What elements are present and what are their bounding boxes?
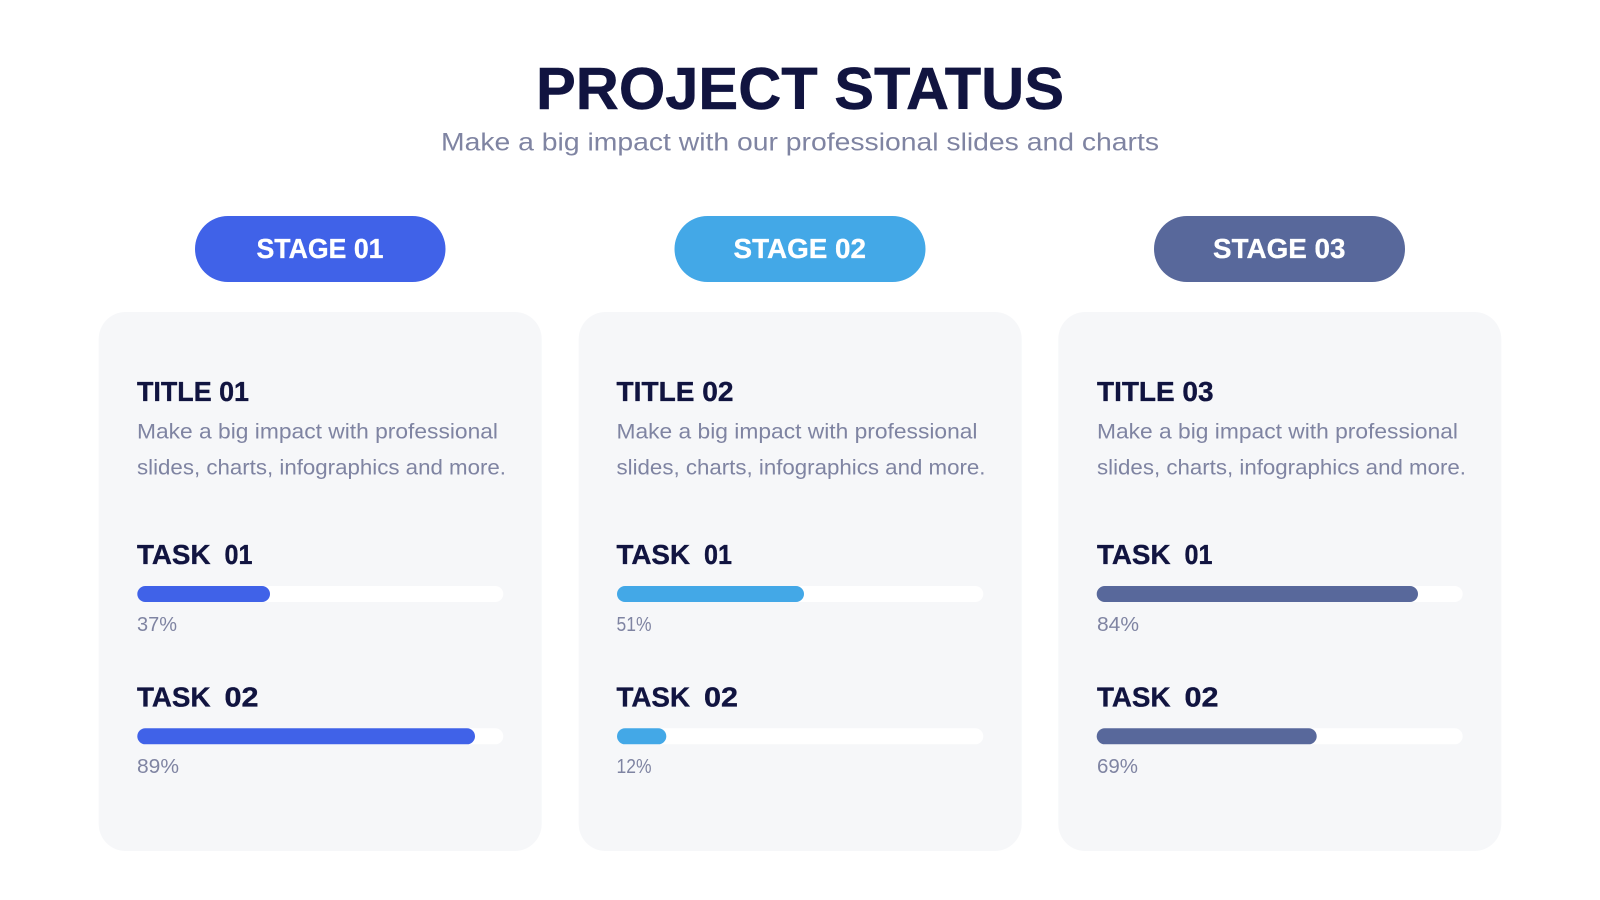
task label: task 02: 02 — [224, 682, 258, 712]
heading: title 02: TITLE 02 — [616, 376, 734, 407]
progress bar: 51% — [617, 586, 983, 602]
task label: task 02: TASK — [616, 682, 690, 712]
progress bar: 12% — [617, 728, 983, 744]
heading: title 01: TITLE 01 — [137, 376, 249, 407]
task label: task 02: TASK — [1097, 682, 1171, 712]
subtitle: Make a big impact with our professional slides and charts — [441, 128, 1159, 156]
badge: stage 02: STAGE 02 — [734, 233, 866, 264]
task label: task 01: TASK — [616, 539, 690, 570]
badge: stage 01 — [195, 216, 446, 282]
progress bar: 89% — [137, 728, 503, 744]
badge: stage 01: STAGE 01 — [256, 233, 384, 264]
text block: description — [616, 420, 986, 480]
text block: description — [1097, 420, 1466, 480]
panel: stage 01 — [99, 312, 542, 851]
task label: task 02: 02 — [1184, 682, 1218, 712]
value: 37%: 37% — [137, 613, 177, 636]
value: 51%: 51% — [616, 613, 652, 636]
task label: task 01: 01 — [704, 539, 732, 570]
task label: task 01: TASK — [1097, 539, 1171, 570]
text block: description: Make a big impact with professional — [1097, 420, 1458, 444]
panel: stage 02 — [579, 312, 1022, 851]
text block: description — [137, 420, 506, 480]
text block: description: slides, charts, infographics and more. — [137, 456, 506, 480]
value: 12%: 12% — [616, 755, 652, 778]
value: 89%: 89% — [137, 755, 179, 778]
progress bar: 69% — [1097, 728, 1463, 744]
value: 84%: 84% — [1097, 613, 1139, 636]
text block: description: Make a big impact with professional — [616, 420, 978, 444]
task label: task 01: 01 — [224, 539, 252, 570]
value: 69%: 69% — [1097, 755, 1138, 778]
task label: task 01: 01 — [1184, 539, 1212, 570]
badge: stage 02 — [674, 216, 926, 282]
task label: task 02: TASK — [137, 682, 211, 712]
text block: description: slides, charts, infographics and more. — [616, 456, 986, 480]
badge: stage 03 — [1154, 216, 1405, 282]
heading: title 03: TITLE 03 — [1097, 376, 1214, 407]
panel: stage 03 — [1058, 312, 1501, 851]
progress bar: 37% — [137, 586, 503, 602]
progress bar: 84% — [1097, 586, 1463, 602]
badge: stage 03: STAGE 03 — [1213, 233, 1346, 264]
task label: task 01: TASK — [137, 539, 211, 570]
text block: description: slides, charts, infographics and more. — [1097, 456, 1466, 480]
task label: task 02: 02 — [704, 682, 738, 712]
text block: description: Make a big impact with professional — [137, 420, 498, 444]
title: PROJECT STATUS — [536, 55, 1064, 122]
